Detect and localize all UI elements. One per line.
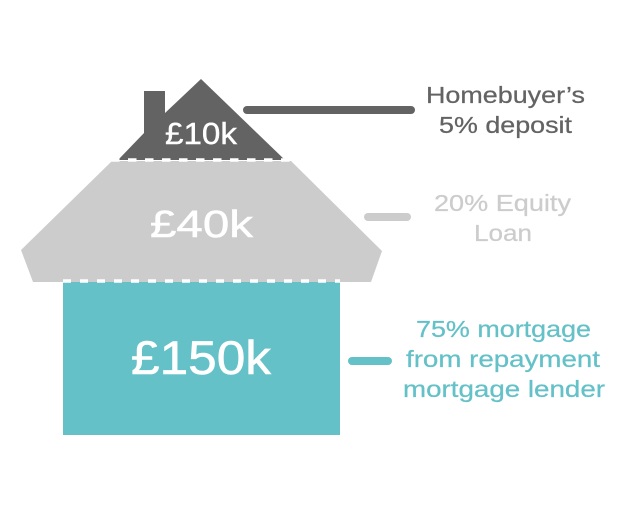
base: mortgage section: £150k — [131, 331, 272, 384]
leader line: deposit — [247, 106, 411, 114]
leader line: equity loan — [368, 213, 407, 221]
roof: homebuyer deposit section — [118, 79, 285, 160]
middle: equity loan section: £40k — [150, 204, 254, 246]
base: mortgage section — [63, 282, 340, 435]
middle: equity loan section — [21, 161, 382, 282]
label: homebuyer's deposit: 5% deposit — [439, 112, 573, 138]
label: equity loan: 20% Equity — [434, 190, 572, 216]
label: homebuyer's deposit: Homebuyer’s — [426, 82, 585, 108]
house: stacked funding sections — [21, 79, 382, 435]
label: mortgage: from repayment — [406, 346, 601, 372]
roof: homebuyer deposit section: £10k — [165, 116, 238, 151]
label: mortgage: mortgage lender — [403, 376, 605, 402]
leader line: mortgage — [352, 357, 388, 365]
label: mortgage — [403, 316, 605, 402]
label: homebuyer's deposit — [426, 82, 585, 138]
label: equity loan: Loan — [474, 220, 532, 246]
label: mortgage: 75% mortgage — [416, 316, 591, 342]
label: equity loan — [434, 190, 572, 246]
